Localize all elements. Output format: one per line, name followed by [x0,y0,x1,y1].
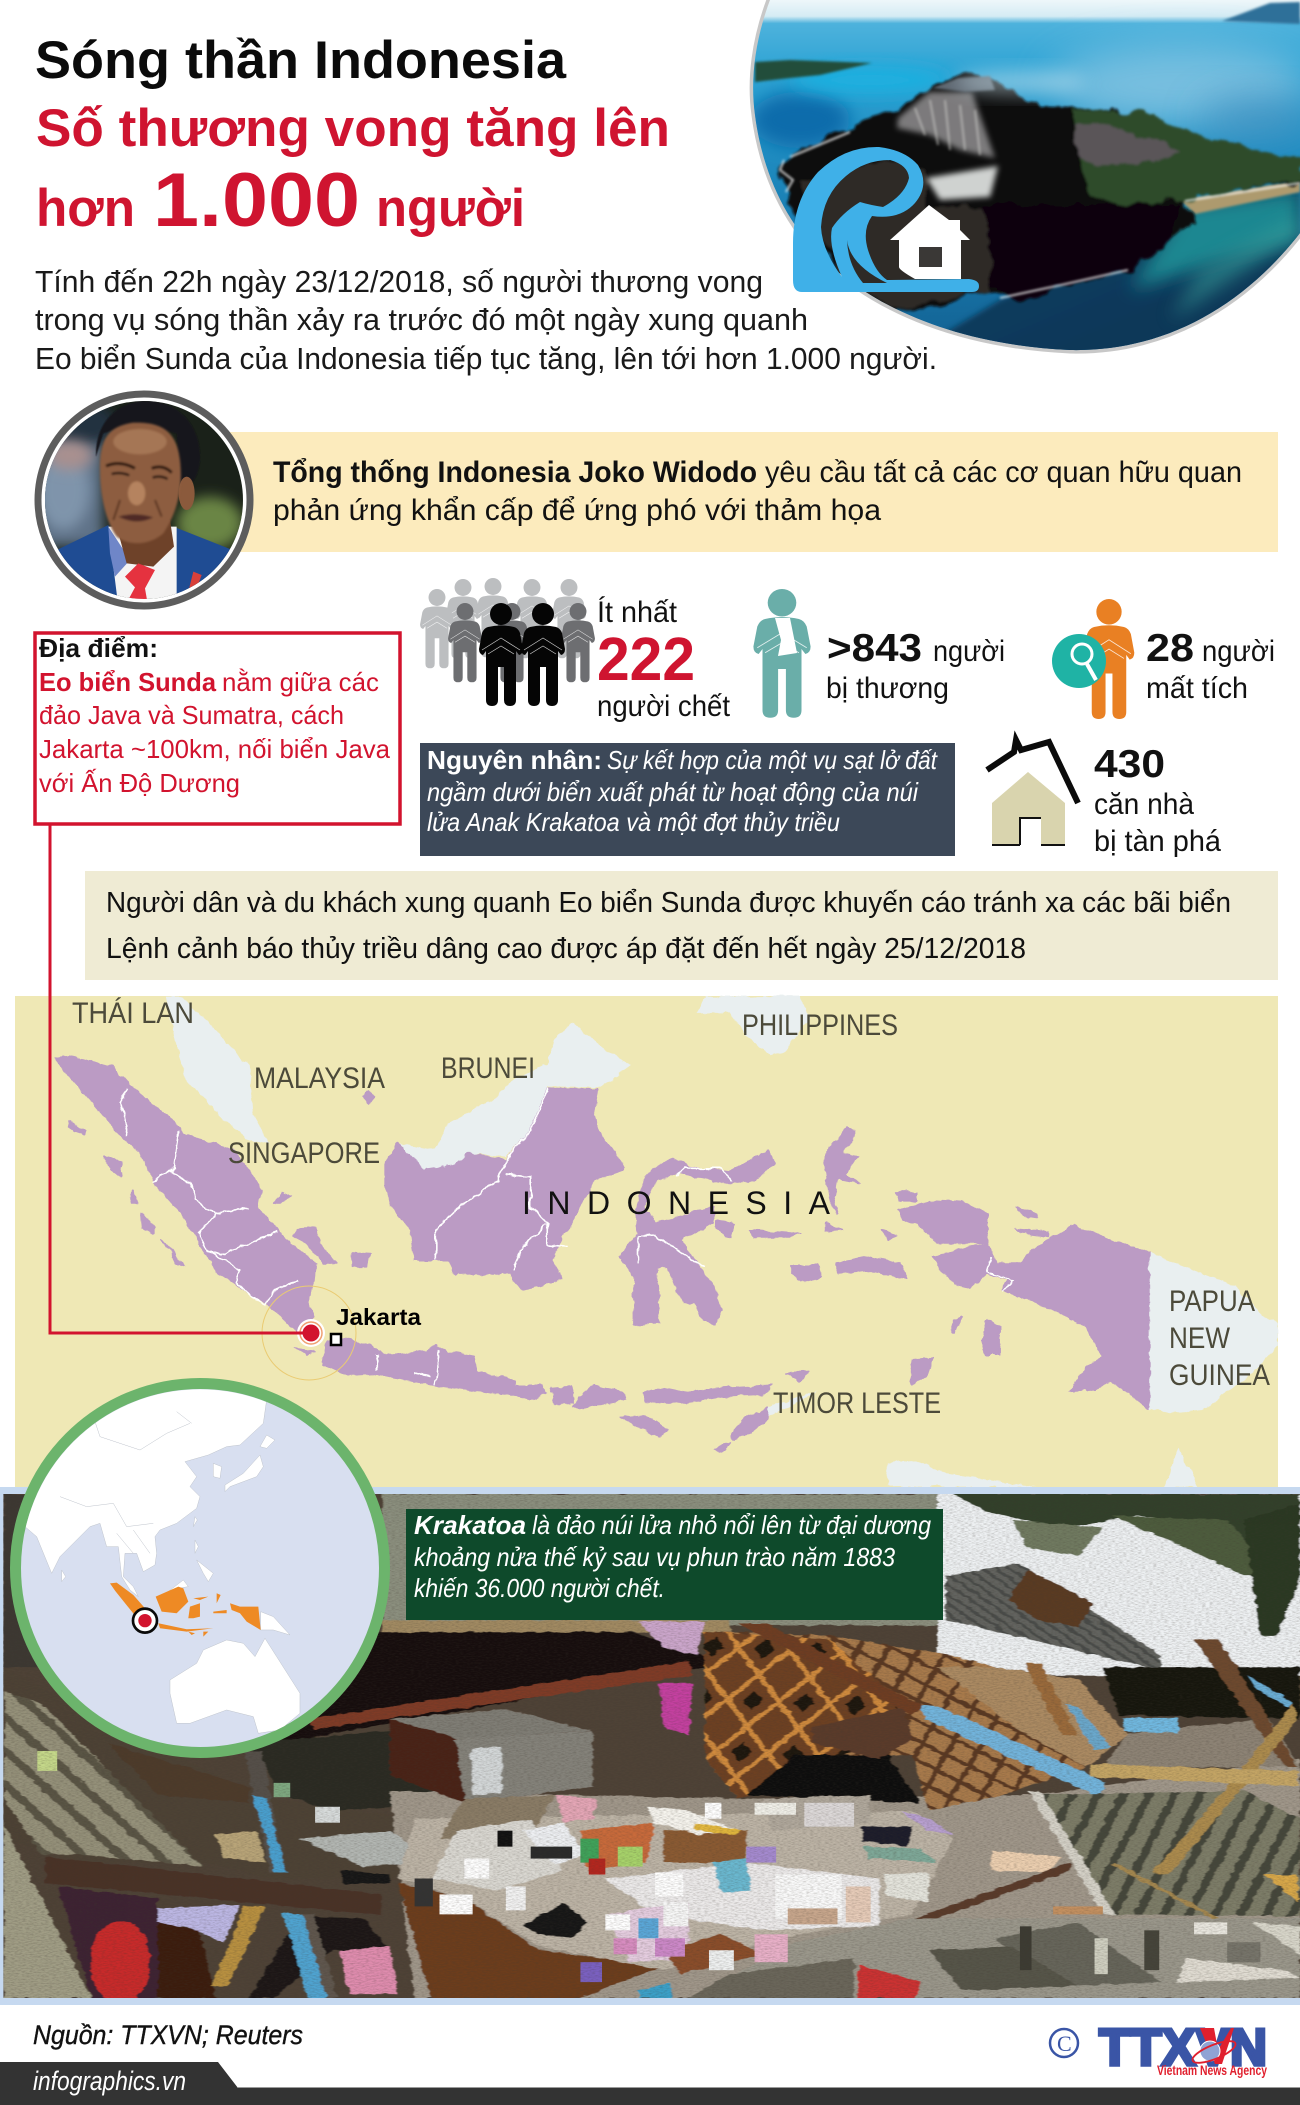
panel: Krakatoa note: khoảng nửa thế kỷ sau vụ phun trào năm 1883 [414,1542,895,1572]
marker: Sunda Strait [262,1286,356,1380]
debris scatter [37,1751,1260,1982]
intro paragraph: Tính đến 22h ngày 23/12/2018, số người thương vong [35,264,763,299]
label: Philippines: PHILIPPINES [742,1009,898,1042]
label: Indonesia: INDONESIA [522,1185,831,1221]
stat: houses destroyed: bị tàn phá [1094,825,1221,858]
panel: president statement [225,432,1278,552]
label: Malaysia: MALAYSIA [254,1062,385,1095]
stat: injured: người [933,635,1005,668]
panel: location note [35,633,400,824]
stat: houses destroyed: căn nhà [1094,788,1194,821]
title line 3: hơn [36,179,135,238]
panel: Krakatoa note: Krakatoa [414,1510,526,1540]
stat: injured: bị thương [826,672,949,705]
panel: Krakatoa note: khiến 36.000 người chết. [414,1573,665,1603]
marker: Jakarta: Jakarta [336,1304,421,1330]
icon: destroyed house [987,740,1078,845]
title [35,31,670,243]
map: Indonesia [15,996,1278,1487]
label: Papua New Guinea: NEW [1169,1322,1231,1355]
panel: warning: Lệnh cảnh báo thủy triều dâng cao được áp đặt đến hết ngày 25/12/2018 [106,933,1026,965]
panel: cause: ngầm dưới biển xuất phát từ hoạt động của núi [427,777,919,807]
panel: Krakatoa note: là đảo núi lửa nhỏ nổi lên từ đại dương [532,1510,931,1540]
title line 2: Số thương vong tăng lên [36,99,670,158]
stat: missing: người [1202,635,1275,668]
panel: Krakatoa note [406,1509,943,1620]
stat: deaths: 222 [597,625,695,693]
intro paragraph: trong vụ sóng thần xảy ra trước đó một ngày xung quanh [35,302,808,337]
neighbouring land [166,997,1278,1487]
Indonesian islands [56,1056,1148,1452]
icon: tsunami wave and house [793,147,979,292]
title line 3 [36,158,525,243]
photo: tsunami debris [0,1487,1300,2005]
stat: deaths: Ít nhất [597,596,678,629]
icon: group of people [420,578,595,706]
stat: houses destroyed: 430 [1094,743,1165,786]
label: Singapore: SINGAPORE [228,1137,380,1170]
stat: injured: >843 [827,627,922,670]
label: Papua New Guinea: GUINEA [1169,1359,1270,1392]
title line 3: người [376,179,525,238]
logo: TTXVN: TTXVN [1099,2019,1267,2077]
photo: portrait of president [37,394,250,610]
panel: location note: nằm giữa các [222,667,379,697]
panel: cause: lửa Anak Krakatoa và một đợt thủy triều [427,807,840,837]
panel: cause: Sự kết hợp của một vụ sạt lở đất [607,745,939,775]
panel: president statement: phản ứng khẩn cấp để ứng phó với thảm họa [273,494,881,527]
stat: missing: mất tích [1146,672,1248,705]
panel: location note: với Ấn Độ Dương [39,768,240,798]
intro paragraph [35,264,937,376]
label: Thailand: THÁI LAN [72,997,194,1030]
province borders [120,1088,1013,1385]
stat: deaths: người chết [597,690,731,723]
footer bar [0,2062,1300,2105]
stat: houses destroyed [987,740,1221,858]
label: Timor Leste: TIMOR LESTE [773,1387,941,1420]
source: Nguồn: TTXVN; Reuters [33,2020,303,2050]
stat: injured [753,589,1005,718]
marker: Jakarta [331,1304,421,1345]
title line 3: 1.000 [153,158,360,243]
label: Papua New Guinea: PAPUA [1169,1285,1255,1318]
panel: location note: Jakarta ~100km, nối biển Java [39,734,391,764]
stat: deaths [420,578,731,723]
stat: missing: 28 [1146,627,1194,670]
label: Papua New Guinea [1169,1285,1270,1392]
panel: president statement: Tổng thống Indonesia Joko Widodo [273,456,757,489]
icon: injured person [753,589,811,718]
panel: president statement: yêu cầu tất cả các cơ quan hữu quan [765,456,1242,489]
logo: TTXVN: C [1057,2031,1072,2056]
footer bar: infographics.vn [33,2066,186,2096]
locator globe [0,1380,384,1752]
panel: cause: Nguyên nhân: [427,745,602,775]
icon: missing person with magnifier [1052,599,1134,719]
panel: warning: Người dân và du khách xung quanh Eo biển Sunda được khuyến cáo tránh xa các bãi biển [106,887,1231,919]
panel: location note: đảo Java và Sumatra, cách [39,700,344,730]
label: Brunei: BRUNEI [441,1052,535,1085]
intro paragraph: Eo biển Sunda của Indonesia tiếp tục tăng, lên tới hơn 1.000 người. [35,341,937,376]
connector line: location note to map marker [50,824,311,1333]
stat: missing [1052,599,1275,719]
panel: cause [420,743,955,856]
panel: location note: Địa điểm: [39,633,158,663]
title line 1: Sóng thần Indonesia [35,31,567,90]
panel: warning [85,871,1278,980]
photo: Anak Krakatoa volcano in circle [740,0,1300,360]
panel: location note: Eo biển Sunda [39,667,217,697]
